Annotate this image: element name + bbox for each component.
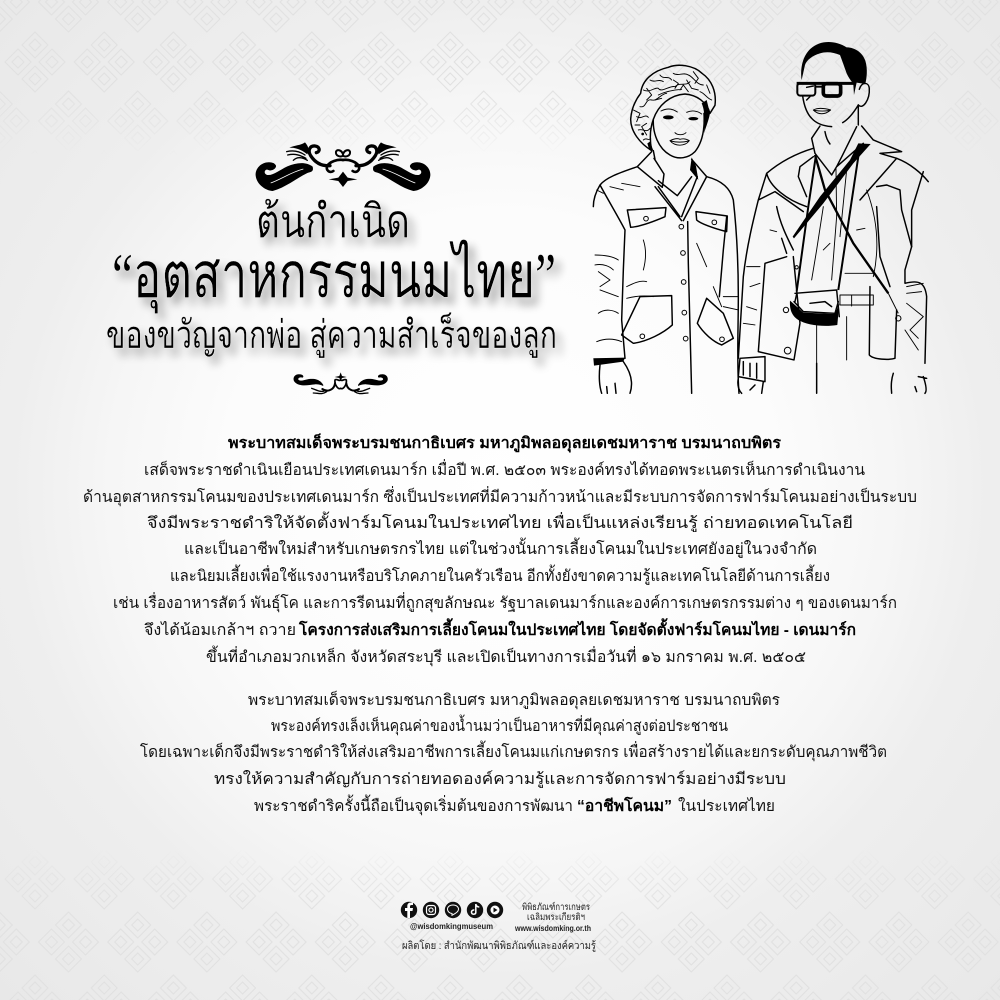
hand	[599, 362, 632, 393]
body paragraph 2: พระราชดำริครั้งนี้ถือเป็นจุดเริ่มต้นของการพัฒนา	[254, 794, 573, 816]
body paragraph 2: พระองค์ทรงเล็งเห็นคุณค่าของน้ำนมว่าเป็นอาหารที่มีคุณค่าสูงต่อประชาชน	[271, 714, 728, 736]
footer: museum name: www.wisdomking.or.th	[514, 924, 591, 933]
pockets	[622, 208, 733, 345]
body paragraph 2: ทรงให้ความสำคัญกับการถ่ายทอดองค์ความรู้และการจัดการฟาร์มอย่างมีระบบ	[214, 770, 786, 789]
footer: social handle: @wisdomkingmuseum	[410, 922, 493, 931]
woman	[593, 65, 739, 393]
body paragraph 1: เสด็จพระราชดำเนินเยือนประเทศเดนมาร์ก เมื่อปี พ.ศ. ๒๕๐๓ พระองค์ทรงได้ทอดพระเนตรเห็นการดำเนินงาน	[144, 459, 865, 479]
footer: museum name: พิพิธภัณฑ์การเกษตร	[522, 901, 590, 913]
right jacket drape	[869, 185, 912, 359]
straps	[815, 155, 888, 293]
ornament: bottom flourish	[294, 372, 388, 394]
jacket body	[738, 148, 928, 363]
glasses	[797, 83, 855, 96]
body paragraph 1: และเป็นอาชีพใหม่สำหรับเกษตรกรไทย แต่ในช่วงนั้นการเลี้ยงโคนมในประเทศยังอยู่ในวงจำกัด	[184, 537, 817, 559]
footer: social icons	[401, 902, 503, 918]
body paragraph 2: ในประเทศไทย	[678, 797, 775, 815]
hair	[801, 42, 867, 95]
title line 1: ต้นกำเนิด	[256, 196, 410, 247]
body paragraph 2	[140, 690, 887, 816]
body paragraph 1: ด้านอุตสาหกรรมโคนมของประเทศเดนมาร์ก ซึ่งเป็นประเทศที่มีความก้าวหน้าและมีระบบการจัดการฟาร์มโคนมอย่างเป็นระบบ	[83, 486, 917, 507]
body paragraph 2: โดยเฉพาะเด็กจึงมีพระราชดำริให้ส่งเสริมอาชีพการเลี้ยงโคนมแก่เกษตรกร เพื่อสร้างรายได้และยกระดับคุณภาพชีวิต	[140, 740, 887, 762]
hair net	[631, 65, 715, 151]
footer: credit: ผลิตโดย : สำนักพัฒนาพิพิธภัณฑ์และองค์ความรู้	[402, 939, 596, 952]
body paragraph 2: พระบาทสมเด็จพระบรมชนกาธิเบศร มหาภูมิพลอดุลยเดชมหาราช บรมนาถบพิตร	[248, 690, 780, 710]
body paragraph 1: จึงได้น้อมเกล้าฯ ถวาย	[144, 621, 296, 639]
title line 3: ของขวัญจากพ่อ สู่ความสำเร็จของลูก	[106, 311, 557, 358]
ear	[858, 83, 869, 106]
side hair	[647, 100, 710, 151]
title	[106, 196, 557, 358]
body paragraph 1: ขึ้นที่อำเภอมวกเหล็ก จังหวัดสระบุรี และเปิดเป็นทางการเมื่อวันที่ ๑๖ มกราคม พ.ศ. ๒๕๐๕	[206, 645, 806, 667]
title line 2: “อุตสาหกรรมนมไทย”	[112, 239, 556, 314]
icon: youtube play	[487, 902, 503, 918]
ornament: top flourish	[256, 142, 430, 191]
body paragraph 1	[83, 432, 917, 667]
royal name heading: พระบาทสมเด็จพระบรมชนกาธิเบศร มหาภูมิพลอดุลยเดชมหาราช บรมนาถบพิตร	[228, 432, 782, 454]
collar and neck	[812, 105, 902, 200]
body paragraph 1: เช่น เรื่องอาหารสัตว์ พันธุ์โค และการรีดนมที่ถูกสุขลักษณะ รัฐบาลเดนมาร์กและองค์การเกษตรกรรมต่าง ๆ ของเดนมาร์ก	[113, 592, 897, 613]
body paragraph 1: จึงมีพระราชดำริให้จัดตั้งฟาร์มโคนมในประเทศไทย เพื่อเป็นแหล่งเรียนรู้ ถ่ายทอดเทคโนโลยี	[147, 511, 853, 533]
body paragraph 1: โครงการส่งเสริมการเลี้ยงโคนมในประเทศไทย โดยจัดตั้งฟาร์มโคนมไทย - เดนมาร์ก	[298, 618, 856, 639]
illustration: royal couple line drawing	[593, 42, 928, 393]
face	[653, 113, 704, 158]
camera bag	[794, 290, 839, 317]
man	[738, 42, 928, 393]
icon: instagram	[423, 902, 439, 918]
body paragraph 1: และนิยมเลี้ยงเพื่อใช้แรงงานหรือบริโภคภายในครัวเรือน อีกทั้งยังขาดความรู้และเทคโนโลยีด้านการเลี้ยง	[170, 564, 830, 586]
icon: tiktok	[467, 902, 483, 918]
lips	[813, 108, 831, 114]
wrinkles	[595, 183, 738, 342]
icon: facebook	[401, 902, 417, 918]
body paragraph 2: “อาชีพโคนม”	[577, 796, 672, 815]
shirt stripes	[812, 168, 877, 393]
footer: museum name: เฉลิมพระเกียรติฯ	[527, 911, 585, 923]
footer: museum name	[514, 901, 591, 933]
face	[803, 86, 858, 127]
jacket body	[593, 167, 739, 393]
icon: line	[445, 902, 461, 918]
lower jacket and hands	[783, 266, 901, 354]
neck and collar	[637, 151, 707, 221]
buttons	[640, 216, 724, 342]
